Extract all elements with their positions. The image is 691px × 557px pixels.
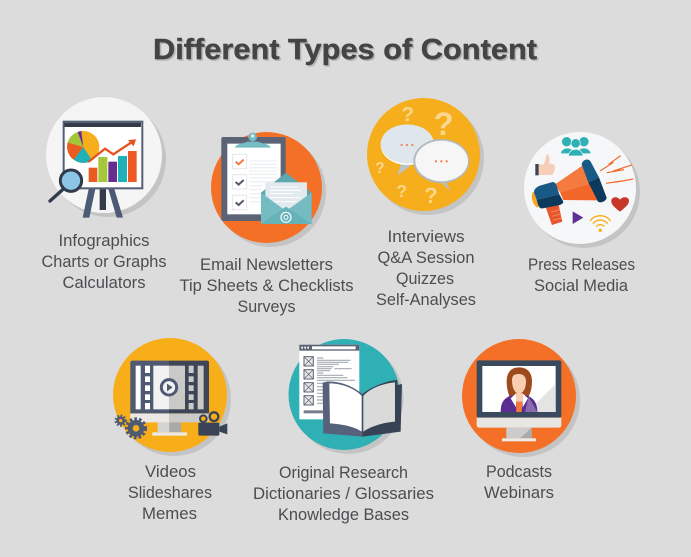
icon: speech bubbles and question marks: ? [401,103,414,126]
title: Different Types of Content [154,36,539,68]
icon: document and open book [299,345,402,437]
label: podcasts [484,463,554,502]
icon: monitor with presenter [477,360,561,441]
icon: clipboard and envelope [221,133,312,224]
label: videos: Memes [142,505,197,523]
icon: presentation board [50,122,142,218]
label: press releases: Press Releases [528,256,635,274]
icon: speech bubbles and question marks: ? [424,183,438,208]
circle: videos background [113,338,231,456]
icon: speech bubbles and question marks [375,103,469,208]
panel: original research [253,339,434,524]
circle: email background [211,132,326,247]
label: interviews: Quizzes [396,270,454,288]
label: email newsletters: Surveys [238,298,296,316]
circle: press background [524,132,640,248]
label: podcasts: Webinars [484,484,554,502]
label: podcasts: Podcasts [486,463,552,481]
label: original research [253,464,434,524]
label: infographics: Infographics [58,232,150,250]
label: email newsletters: Email Newsletters [200,256,333,274]
label: press releases [528,256,635,295]
label: infographics [42,232,166,292]
icon: megaphone and social symbols [532,137,633,232]
title: Different Types of Content [153,34,537,66]
icon: speech bubbles and question marks: ? [434,105,454,142]
label: videos: Videos [145,463,196,481]
panel: interviews [367,98,484,309]
label: press releases: Social Media [534,277,629,295]
circle: podcasts background [462,339,580,457]
label: infographics: Charts or Graphs [42,253,166,271]
label: videos: Slideshares [128,484,212,502]
label: original research: Original Research [279,464,408,482]
panel: podcasts [462,339,580,502]
icon: video monitor, gears and camera [116,361,227,438]
panel: email newsletters [180,132,354,316]
circle: infographics background [46,97,166,217]
panel: infographics [42,97,166,292]
label: interviews: Interviews [388,228,464,246]
circle: interviews background [367,98,484,215]
label: interviews [376,228,476,309]
circle: research background [288,339,404,454]
label: email newsletters [180,256,354,316]
label: email newsletters: Tip Sheets & Checklists [180,277,354,295]
label: interviews: Self-Analyses [376,291,476,309]
panel: press releases [524,132,640,295]
label: videos [128,463,212,523]
icon: speech bubbles and question marks: ? [375,160,385,177]
panel: videos [113,338,231,523]
label: original research: Knowledge Bases [278,506,409,524]
label: infographics: Calculators [62,274,146,292]
label: original research: Dictionaries / Glossaries [253,485,434,503]
label: interviews: Q&A Session [378,249,474,267]
icon: speech bubbles and question marks: ? [396,181,407,201]
